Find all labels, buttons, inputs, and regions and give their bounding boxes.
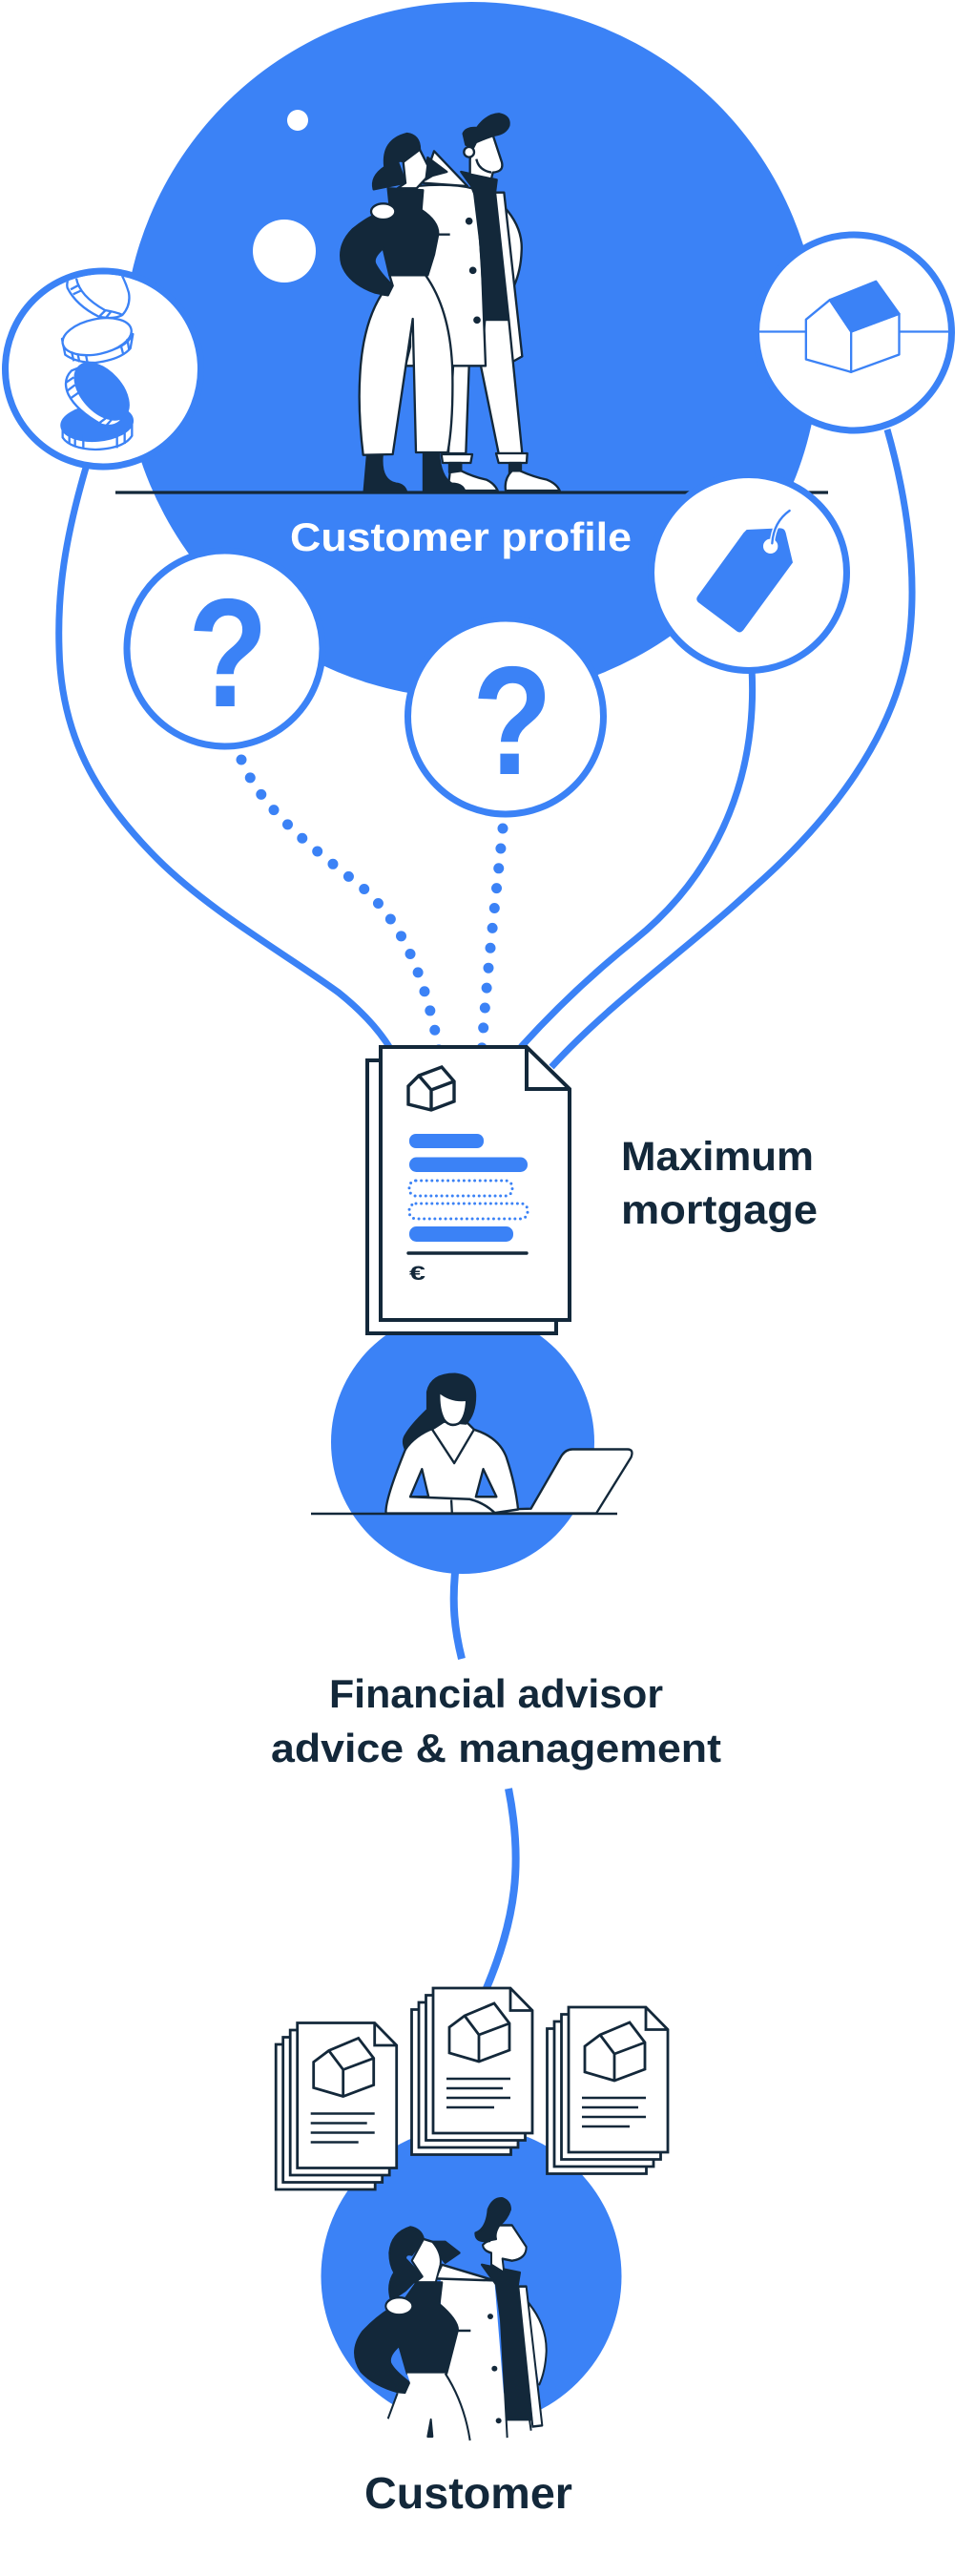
- document stack: left: [276, 2023, 397, 2189]
- panel: customer disc: [321, 2126, 622, 2426]
- connector: price tag to document: [521, 668, 753, 1047]
- decorative bubble large: [253, 220, 316, 283]
- illustration: couple standing: [341, 114, 560, 492]
- document euro sign: €: [409, 1263, 425, 1285]
- icon: price tag circle: [651, 475, 847, 670]
- label: financial advisor: [271, 1671, 721, 1770]
- label: customer: Customer: [364, 2468, 572, 2518]
- heading: customer profile: Customer profile: [290, 514, 632, 559]
- icon: first question circle: ?: [188, 567, 268, 740]
- icon: house circle: [756, 235, 952, 430]
- connector: advisor to label: [454, 1573, 462, 1659]
- document dotted row one: [409, 1181, 512, 1196]
- illustration: customer couple close-up: [355, 2198, 547, 2441]
- document dotted row two: [409, 1204, 528, 1219]
- document stack: centre: [412, 1988, 532, 2155]
- connector: coins to document: [59, 468, 391, 1050]
- illustration: financial advisor at laptop: [386, 1374, 632, 1514]
- connector: label to customer documents: [484, 1789, 516, 1995]
- decorative bubble small: [287, 110, 308, 131]
- panel: financial advisor disc: [331, 1310, 594, 1574]
- icon: first question circle: [127, 551, 322, 746]
- label: maximum mortgage: mortgage: [621, 1187, 818, 1233]
- label: financial advisor: Financial advisor: [329, 1671, 663, 1716]
- document: maximum mortgage: [367, 1047, 570, 1333]
- icon: second question circle: [408, 618, 603, 814]
- dotted connector: first question: [241, 760, 439, 1050]
- panel: customer profile disc: [123, 2, 819, 699]
- connector: house to document: [551, 429, 912, 1067]
- icon: document house: [408, 1067, 454, 1110]
- ground line: [115, 491, 828, 494]
- label: financial advisor: advice & management: [271, 1726, 721, 1770]
- document row two: [409, 1157, 528, 1172]
- label: maximum mortgage: [621, 1134, 818, 1233]
- document row one: [409, 1134, 484, 1148]
- document stack: right: [548, 2007, 668, 2174]
- icon: coins circle: [6, 270, 200, 467]
- dotted connector: second question: [482, 828, 503, 1050]
- document total line: [408, 1251, 527, 1255]
- label: maximum mortgage: Maximum: [621, 1134, 814, 1180]
- document row three: [409, 1226, 513, 1242]
- icon: second question circle: ?: [472, 635, 552, 807]
- desk line: [311, 1513, 617, 1515]
